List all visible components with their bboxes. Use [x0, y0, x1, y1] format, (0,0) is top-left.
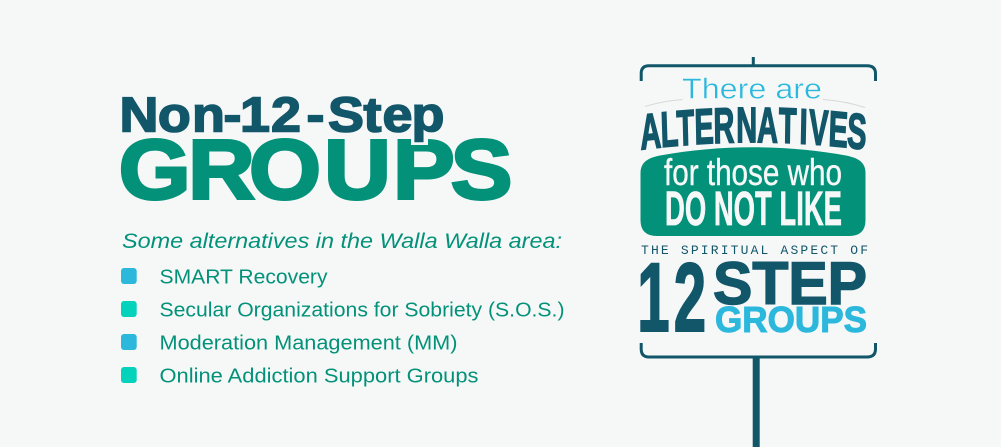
sign: [637, 57, 876, 447]
text: THE SPIRITUAL ASPECT OF: THE SPIRITUAL ASPECT OF: [641, 243, 868, 258]
text: ALTERNATIVES arched: ALTERNATIVES: [639, 97, 868, 161]
heading: GROUPS: GROUPS: [119, 122, 512, 217]
decorative arcs beside heading: [645, 100, 865, 108]
text: STEP: STEP: [713, 250, 867, 317]
text: GROUPS: GROUPS: [715, 299, 867, 340]
heading: Non-12-Step: Non-12-Step: [119, 87, 444, 142]
subheading: Some alternatives in the Walla Walla area:: [122, 230, 562, 253]
list item: Online Addiction Support Groups: Online Addiction Support Groups: [160, 366, 478, 388]
title block: [119, 87, 512, 217]
sign top bracket and pin: [641, 57, 876, 81]
text: for those who: for those who: [664, 152, 842, 193]
list item: SMART Recovery: SMART Recovery: [160, 266, 328, 288]
green panel: [640, 147, 866, 236]
sign bottom bracket: [641, 343, 876, 357]
list item: Moderation Management: Moderation Management (MM): [160, 332, 458, 354]
text: 12: 12: [637, 244, 706, 352]
list item: Secular Organizations for Sobriety: Secular Organizations for Sobriety (S.O.S.): [160, 300, 564, 322]
sign pole: [753, 357, 760, 447]
text: There are: There are: [682, 74, 822, 106]
text: DO NOT LIKE: DO NOT LIKE: [665, 183, 842, 236]
list of alternatives: [121, 266, 564, 388]
